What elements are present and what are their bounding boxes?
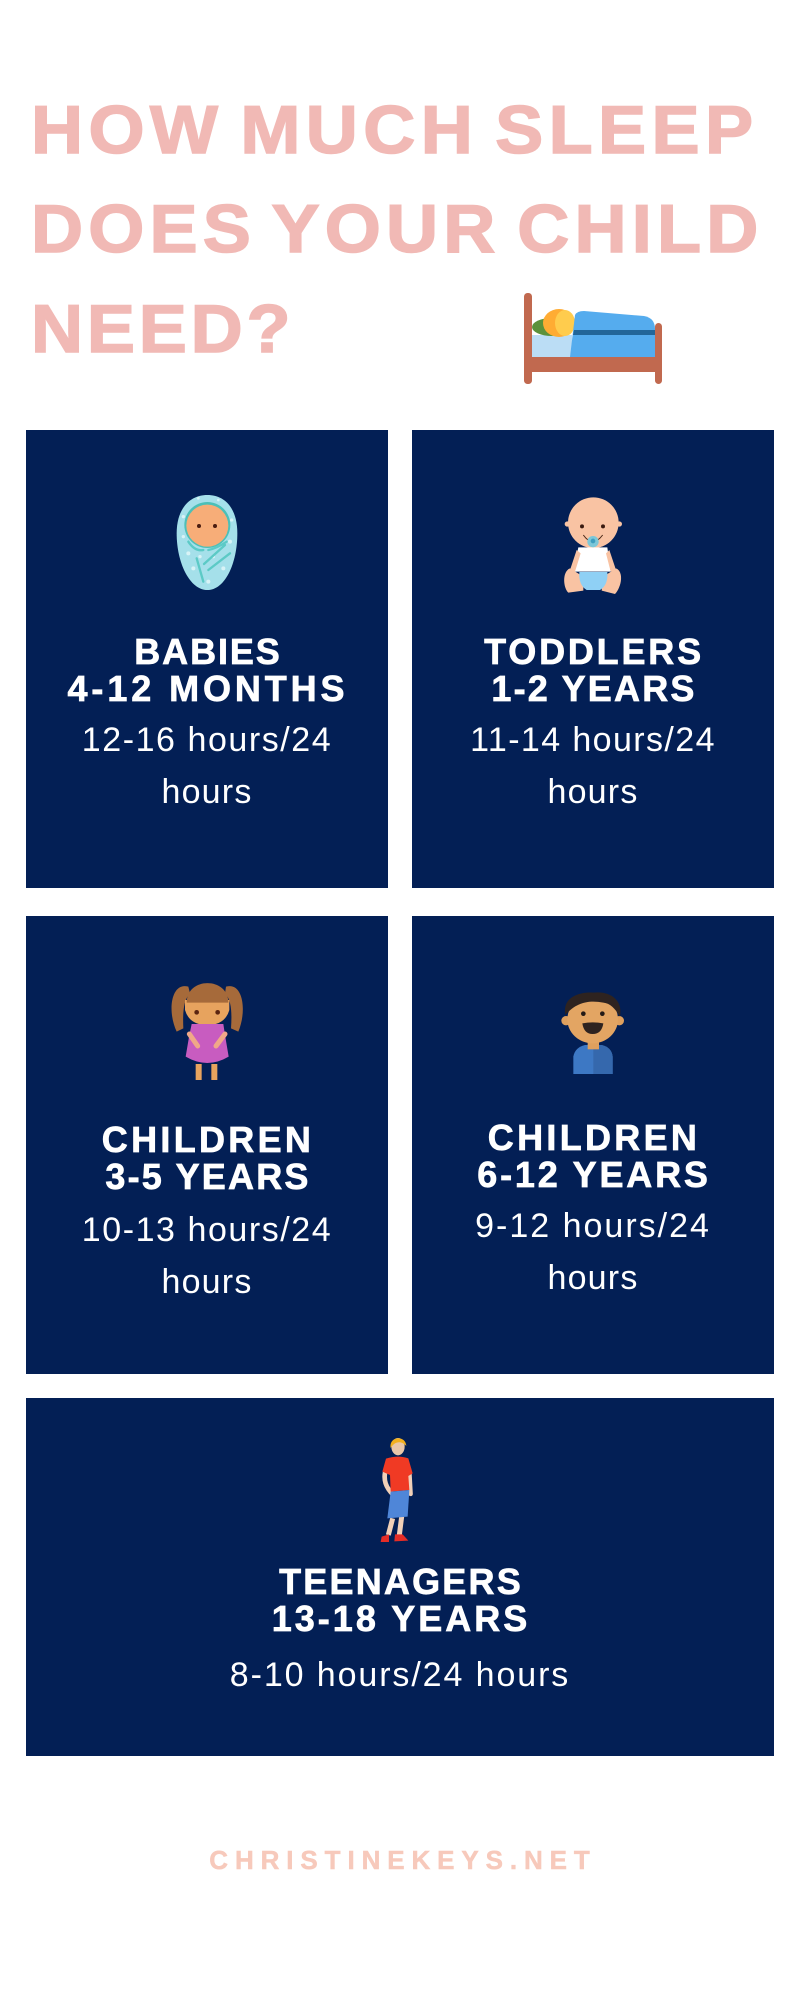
sleep hours: hours bbox=[161, 773, 253, 811]
icon: smiling boy bbox=[561, 992, 624, 1074]
sleep hours bbox=[82, 721, 332, 811]
sleep hours: 9-12 hours/24 bbox=[475, 1207, 711, 1245]
heading: TODDLERS bbox=[484, 631, 704, 672]
heading: TEENAGERS bbox=[279, 1561, 523, 1602]
heading: 4-12 MONTHS bbox=[68, 668, 348, 709]
heading: CHILDREN bbox=[488, 1117, 700, 1158]
heading bbox=[272, 1561, 530, 1639]
heading: 6-12 YEARS bbox=[477, 1154, 711, 1195]
panel: children 3-5 bbox=[26, 916, 388, 1374]
title: DOES YOUR CHILD bbox=[31, 191, 763, 267]
sleep hours: 12-16 hours/24 bbox=[82, 721, 332, 759]
title: NEED? bbox=[31, 291, 294, 367]
title bbox=[31, 92, 763, 367]
icon: bed bbox=[524, 293, 662, 384]
heading: CHILDREN bbox=[102, 1119, 314, 1160]
heading bbox=[102, 1119, 314, 1197]
heading: 1-2 YEARS bbox=[491, 668, 697, 709]
sleep hours bbox=[475, 1207, 711, 1297]
panel: teenagers bbox=[26, 1398, 774, 1756]
title: HOW MUCH SLEEP bbox=[31, 92, 758, 168]
sleep hours: hours bbox=[547, 1259, 639, 1297]
sleep hours: hours bbox=[547, 773, 639, 811]
footer: website: CHRISTINEKEYS.NET bbox=[209, 1845, 597, 1875]
sleep hours: 11-14 hours/24 bbox=[470, 721, 716, 759]
icon: swaddled baby bbox=[176, 495, 238, 590]
sleep hours: hours bbox=[161, 1263, 253, 1301]
sleep hours bbox=[470, 721, 716, 811]
panel: toddlers bbox=[412, 430, 774, 888]
icon: toddler with pacifier bbox=[564, 497, 622, 594]
panel: babies bbox=[26, 430, 388, 888]
heading: 3-5 YEARS bbox=[105, 1156, 311, 1197]
sleep hours bbox=[82, 1211, 332, 1301]
icon: teenager bbox=[380, 1438, 413, 1542]
heading bbox=[68, 631, 348, 709]
heading: BABIES bbox=[134, 631, 282, 672]
panel: children 6-12 bbox=[412, 916, 774, 1374]
heading bbox=[477, 1117, 711, 1195]
heading bbox=[484, 631, 704, 709]
heading: 13-18 YEARS bbox=[272, 1598, 530, 1639]
sleep hours: 8-10 hours/24 hours bbox=[230, 1656, 570, 1694]
icon: girl with pigtails bbox=[172, 983, 243, 1080]
sleep hours: 10-13 hours/24 bbox=[82, 1211, 332, 1249]
